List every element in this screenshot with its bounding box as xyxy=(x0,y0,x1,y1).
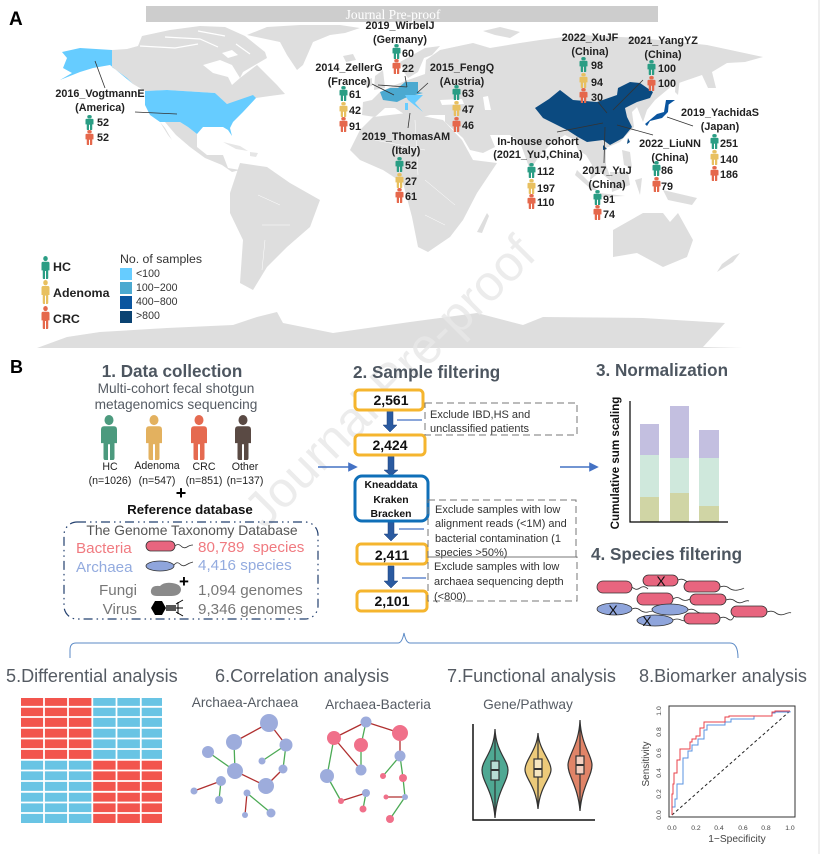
exclusion note 3: archaea sequencing depth xyxy=(434,576,564,588)
legend: groups xyxy=(42,256,110,329)
cohort: 2022_XuJF: 30 xyxy=(591,92,603,104)
reference database panel: 80,789 species xyxy=(198,539,305,556)
ROC curve: 0.4 xyxy=(714,825,724,832)
ROC curve: 0.6 xyxy=(738,825,748,832)
plus sign: + xyxy=(179,572,189,591)
icon: fungus xyxy=(151,583,181,596)
Europe cohorts xyxy=(380,82,423,112)
page edge xyxy=(818,0,820,854)
leader lines xyxy=(95,61,693,163)
cohort: 2014_ZellerG: 61 xyxy=(349,89,361,101)
ROC curve: 0.8 xyxy=(761,825,771,832)
reference database panel: The Genome Taxonomy Database xyxy=(86,522,298,538)
diagonal watermark: Journal Pre-proof xyxy=(233,225,546,538)
network: archaea-archaea: Archaea-Archaea xyxy=(192,695,299,710)
cohort: 2019_YachidaS: 186 xyxy=(720,169,738,181)
cohort: In-house: 112 xyxy=(537,166,554,178)
species illustration: X xyxy=(608,602,618,618)
violin plot xyxy=(473,697,595,820)
ROC curve: 1−Specificity xyxy=(708,834,767,845)
cohort: 2019_WirbelJ xyxy=(366,20,434,75)
cohort: In-house: (2021_YuJ,China) xyxy=(493,149,583,161)
ROC curve: 0.6 xyxy=(656,748,663,758)
cohort: 2019_YachidaS: 2019_YachidaS xyxy=(681,107,759,119)
species illustration xyxy=(597,573,791,629)
step 8 heading: 8.Biomarker analysis xyxy=(639,666,807,686)
legend: number of samples: 100−200 xyxy=(136,282,178,294)
step 1: data collection heading xyxy=(95,362,257,412)
cohort: 2022_LiuNN: 79 xyxy=(661,181,673,193)
legend: number of samples: >800 xyxy=(136,310,160,322)
ROC curve: 0.2 xyxy=(656,789,663,799)
stacked bar chart xyxy=(609,397,728,529)
step 6 heading: 6.Correlation analysis xyxy=(215,666,389,686)
cohort: 2019_ThomasAM: 27 xyxy=(405,176,417,188)
ROC curve: 0.8 xyxy=(656,727,663,737)
cohort: 2015_FengQ: (Austria) xyxy=(440,76,485,88)
icon: virus xyxy=(151,600,183,616)
cohort: 2019_ThomasAM: 61 xyxy=(405,191,417,203)
cohort: 2019_ThomasAM xyxy=(362,131,450,203)
cohort: 2014_ZellerG: 2014_ZellerG xyxy=(315,62,383,74)
count box: 2,561 xyxy=(355,390,423,410)
ROC curve: 0.2 xyxy=(691,825,701,832)
cohort: 2019_WirbelJ: 22 xyxy=(402,63,414,75)
exclusion note 2 xyxy=(428,500,576,559)
cohort: 2019_ThomasAM: (Italy) xyxy=(392,145,421,157)
cohort: 2014_ZellerG xyxy=(315,62,383,133)
ROC curve: 1.0 xyxy=(656,706,663,716)
exclusion note 3: Exclude samples with low xyxy=(434,561,559,573)
cohort: 2022_XuJF: 2022_XuJF xyxy=(562,32,619,44)
reference database panel xyxy=(64,522,318,619)
cohort: 2017_YuJ: 2017_YuJ xyxy=(582,165,632,177)
cohort: In-house: In-house cohort xyxy=(497,136,579,148)
ROC curve: 0.0 xyxy=(667,825,677,832)
cohort: 2021_YangYZ: 100 xyxy=(658,63,676,75)
bracket connecting to analyses xyxy=(70,633,738,658)
panel letter A: A xyxy=(9,9,23,30)
step 5 heading: 5.Differential analysis xyxy=(6,666,178,686)
cohort: 2016_VogtmannE: (America) xyxy=(75,102,125,114)
legend: groups: CRC xyxy=(53,312,80,326)
count box: 2,411: 2,411 xyxy=(375,547,409,563)
network: archaea-bacteria xyxy=(320,697,431,823)
legend: groups: Adenoma xyxy=(53,286,110,300)
ROC curve: 0.4 xyxy=(656,768,663,778)
cohort: In-house: 110 xyxy=(537,197,554,209)
exclusion note 1: unclassified patients xyxy=(430,423,530,435)
cohort: 2016_VogtmannE: 2016_VogtmannE xyxy=(55,88,145,100)
step 1: data collection heading: Multi-cohort fecal shotgun xyxy=(98,381,254,396)
China and Japan xyxy=(535,82,653,150)
violin plot: Gene/Pathway xyxy=(483,697,573,712)
patient groups: (n=1026) xyxy=(89,475,131,487)
step 7 heading: 7.Functional analysis xyxy=(447,666,616,686)
exclusion note 2: species >50%) xyxy=(435,547,507,559)
exclusion note 1: Exclude IBD,HS and xyxy=(430,409,530,421)
patient groups: CRC xyxy=(193,461,216,473)
stacked bar chart: Cumulative sum scaling xyxy=(609,397,622,529)
ROC curve: 0.0 xyxy=(656,810,663,820)
cohort: 2021_YangYZ: (China) xyxy=(644,49,682,61)
cohort: 2022_XuJF: 94 xyxy=(591,77,603,89)
cohort: 2015_FengQ: 46 xyxy=(462,120,474,132)
cohort: 2019_YachidaS: 251 xyxy=(720,138,738,150)
legend: number of samples xyxy=(120,252,202,323)
reference database panel: 4,416 species xyxy=(198,557,292,574)
tools box: Kraken xyxy=(373,495,409,506)
reference database panel: Archaea xyxy=(76,559,133,576)
patient groups: Adenoma xyxy=(134,460,180,472)
cohort: 2015_FengQ: 63 xyxy=(462,88,474,100)
world map xyxy=(37,25,763,348)
species illustration: X xyxy=(656,573,666,589)
ROC curve: Sensitivity xyxy=(641,741,652,787)
cohort: 2015_FengQ xyxy=(430,62,494,132)
reference database panel: Virus xyxy=(103,601,137,618)
watermark bar xyxy=(146,6,658,22)
exclusion note 2: alignment reads (<1M) and xyxy=(435,518,567,530)
step 4: species filtering heading: 4. Species filtering xyxy=(591,545,742,564)
cohort: 2016_VogtmannE xyxy=(55,88,145,145)
patient groups: (n=547) xyxy=(139,475,175,487)
cohort: 2019_YachidaS xyxy=(681,107,759,181)
icon: archaeon xyxy=(146,561,193,571)
tools box xyxy=(355,476,428,521)
count box: 2,411 xyxy=(357,544,427,564)
cohort: 2016_VogtmannE: 52 xyxy=(97,132,109,144)
cohort: 2019_WirbelJ: 60 xyxy=(402,48,414,60)
reference database panel: 9,346 genomes xyxy=(198,601,303,618)
exclusion note 1 xyxy=(425,403,577,435)
USA and Alaska xyxy=(60,48,256,136)
cohort: 2019_YachidaS: 140 xyxy=(720,154,738,166)
ROC curve: 1.0 xyxy=(785,825,795,832)
tools box: Kneaddata xyxy=(364,480,418,491)
cohort: In-house xyxy=(493,136,583,209)
cohort: 2017_YuJ: (China) xyxy=(588,179,626,191)
exclusion note 2: bacterial contamination (1 xyxy=(435,533,561,545)
count box: 2,424: 2,424 xyxy=(372,437,408,453)
cohort: 2014_ZellerG: 42 xyxy=(349,105,361,117)
legend: number of samples: <100 xyxy=(136,268,160,280)
icon: bacterium xyxy=(146,541,193,551)
count box: 2,424 xyxy=(355,435,425,455)
step 2: sample filtering heading: 2. Sample filtering xyxy=(353,363,500,382)
cohort: 2021_YangYZ xyxy=(628,35,698,91)
network: archaea-archaea xyxy=(190,695,299,818)
cohort: 2019_WirbelJ: 2019_WirbelJ xyxy=(366,20,434,32)
cohort: 2021_YangYZ: 2021_YangYZ xyxy=(628,35,698,47)
plus sign: + xyxy=(176,483,186,503)
flowchart: sample filtering xyxy=(355,390,428,611)
patient groups: HC xyxy=(102,461,118,473)
heatmap xyxy=(21,698,162,823)
legend: groups: HC xyxy=(53,260,71,274)
legend: number of samples: No. of samples xyxy=(120,252,202,266)
cohort: 2022_LiuNN: (China) xyxy=(651,152,689,164)
arrow: collection to filtering xyxy=(318,464,356,470)
tools box: Bracken xyxy=(370,509,412,520)
cohort: 2022_LiuNN: 86 xyxy=(661,165,673,177)
cohort: 2022_XuJF: (China) xyxy=(571,46,609,58)
network: archaea-bacteria: Archaea-Bacteria xyxy=(325,697,431,712)
species illustration: X xyxy=(642,613,652,629)
exclusion note 2: Exclude samples with low xyxy=(435,504,560,516)
cohort: 2016_VogtmannE: 52 xyxy=(97,117,109,129)
count box: 2,101 xyxy=(357,591,427,611)
step 1: data collection heading: metagenomics sequencing xyxy=(95,397,257,412)
count box: 2,101: 2,101 xyxy=(374,593,410,609)
ROC curve xyxy=(641,706,795,845)
exclusion note 3: (<800) xyxy=(434,591,466,603)
cohort: 2017_YuJ xyxy=(582,165,632,221)
cohort: 2022_LiuNN xyxy=(639,138,701,193)
cohort: 2022_XuJF: 98 xyxy=(591,60,603,72)
legend: number of samples: 400−800 xyxy=(136,296,178,308)
arrow: filtering to normalization xyxy=(560,464,597,470)
reference database heading: Reference database xyxy=(127,502,253,517)
patient groups: (n=137) xyxy=(227,475,263,487)
reference database panel: Fungi xyxy=(99,582,137,599)
cohort: In-house: 197 xyxy=(537,183,555,195)
exclusion note 3 xyxy=(428,557,577,603)
cohort: 2021_YangYZ: 100 xyxy=(658,78,676,90)
reference database panel: Bacteria xyxy=(76,540,132,557)
cohort: 2017_YuJ: 74 xyxy=(603,209,615,221)
reference database panel: 1,094 genomes xyxy=(198,582,303,599)
step 3: normalization heading: 3. Normalization xyxy=(596,361,728,380)
patient groups xyxy=(89,415,263,487)
cohort: 2019_WirbelJ: (Germany) xyxy=(373,34,427,46)
cohort: 2017_YuJ: 91 xyxy=(603,194,615,206)
panel letter B: B xyxy=(10,357,23,377)
cohort: 2015_FengQ: 47 xyxy=(462,104,474,116)
patient groups: Other xyxy=(232,461,259,473)
patient groups: (n=851) xyxy=(186,475,222,487)
cohort: 2019_YachidaS: (Japan) xyxy=(701,121,740,133)
cohort: 2019_ThomasAM: 52 xyxy=(405,160,417,172)
cohort: 2014_ZellerG: 91 xyxy=(349,121,361,133)
cohort: 2015_FengQ: 2015_FengQ xyxy=(430,62,494,74)
cohort: 2022_XuJF xyxy=(562,32,619,104)
count box: 2,561: 2,561 xyxy=(373,392,409,408)
step 1: data collection heading: 1. Data collection xyxy=(102,362,242,381)
cohort: 2019_ThomasAM: 2019_ThomasAM xyxy=(362,131,450,143)
cohort: 2022_LiuNN: 2022_LiuNN xyxy=(639,138,701,150)
cohort: 2014_ZellerG: (France) xyxy=(328,76,371,88)
watermark bar: Journal Pre-proof xyxy=(346,7,441,22)
